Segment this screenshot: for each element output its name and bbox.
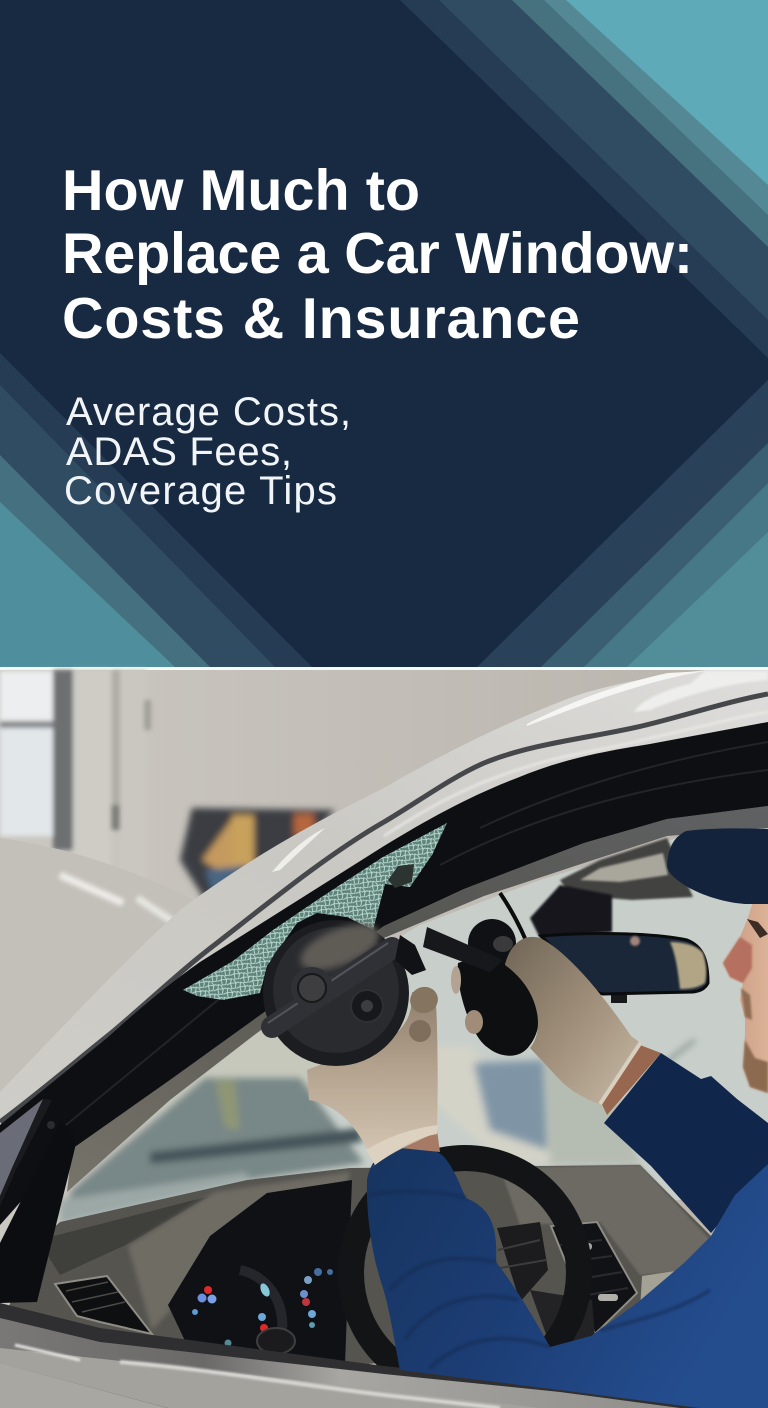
door sill	[0, 1303, 717, 1408]
title: How Much to	[62, 159, 420, 223]
centre vents	[497, 1222, 637, 1345]
subtitle: Coverage Tips	[64, 469, 337, 513]
right wrist	[600, 1045, 661, 1115]
dashboard	[0, 1165, 720, 1370]
shattered glass	[183, 823, 447, 1000]
garage background	[0, 670, 768, 1408]
second suction cup and cable	[423, 893, 539, 1056]
title: Replace a Car Window:	[62, 222, 693, 286]
subtitle	[64, 390, 351, 513]
subtitle: ADAS Fees,	[66, 430, 292, 474]
window trim and dark pillar	[0, 670, 768, 1225]
technician face	[723, 900, 768, 1093]
view through the window	[50, 810, 768, 1240]
interior headliner and mirror mount	[530, 838, 693, 938]
black pillar seal	[0, 722, 768, 1225]
subtitle: Average Costs,	[66, 390, 351, 434]
upper sleeve	[604, 1053, 768, 1233]
white car hood	[0, 838, 205, 1100]
A-pillar and door mirror mount	[0, 1099, 75, 1303]
main suction cup tool	[263, 915, 426, 1066]
air vent	[55, 1276, 152, 1334]
left wrist	[372, 1130, 440, 1168]
divider	[0, 667, 768, 670]
blurred shelf in background	[180, 808, 335, 900]
left glove	[307, 983, 442, 1165]
groove	[0, 694, 768, 1122]
sleeve folds	[370, 1192, 710, 1368]
right glove	[451, 937, 642, 1105]
title: Costs & Insurance	[62, 287, 580, 351]
title	[62, 159, 693, 351]
panel: header background	[0, 0, 768, 667]
grey inner beam	[67, 806, 768, 1192]
instrument gauges	[192, 1268, 333, 1354]
technician cap	[667, 828, 768, 904]
white roof trim	[0, 670, 768, 1125]
torso and front sleeve	[367, 1148, 768, 1408]
photo: technician repairing a car window	[0, 670, 768, 1408]
rearview mirror	[541, 933, 708, 1003]
steering wheel	[351, 1158, 579, 1388]
